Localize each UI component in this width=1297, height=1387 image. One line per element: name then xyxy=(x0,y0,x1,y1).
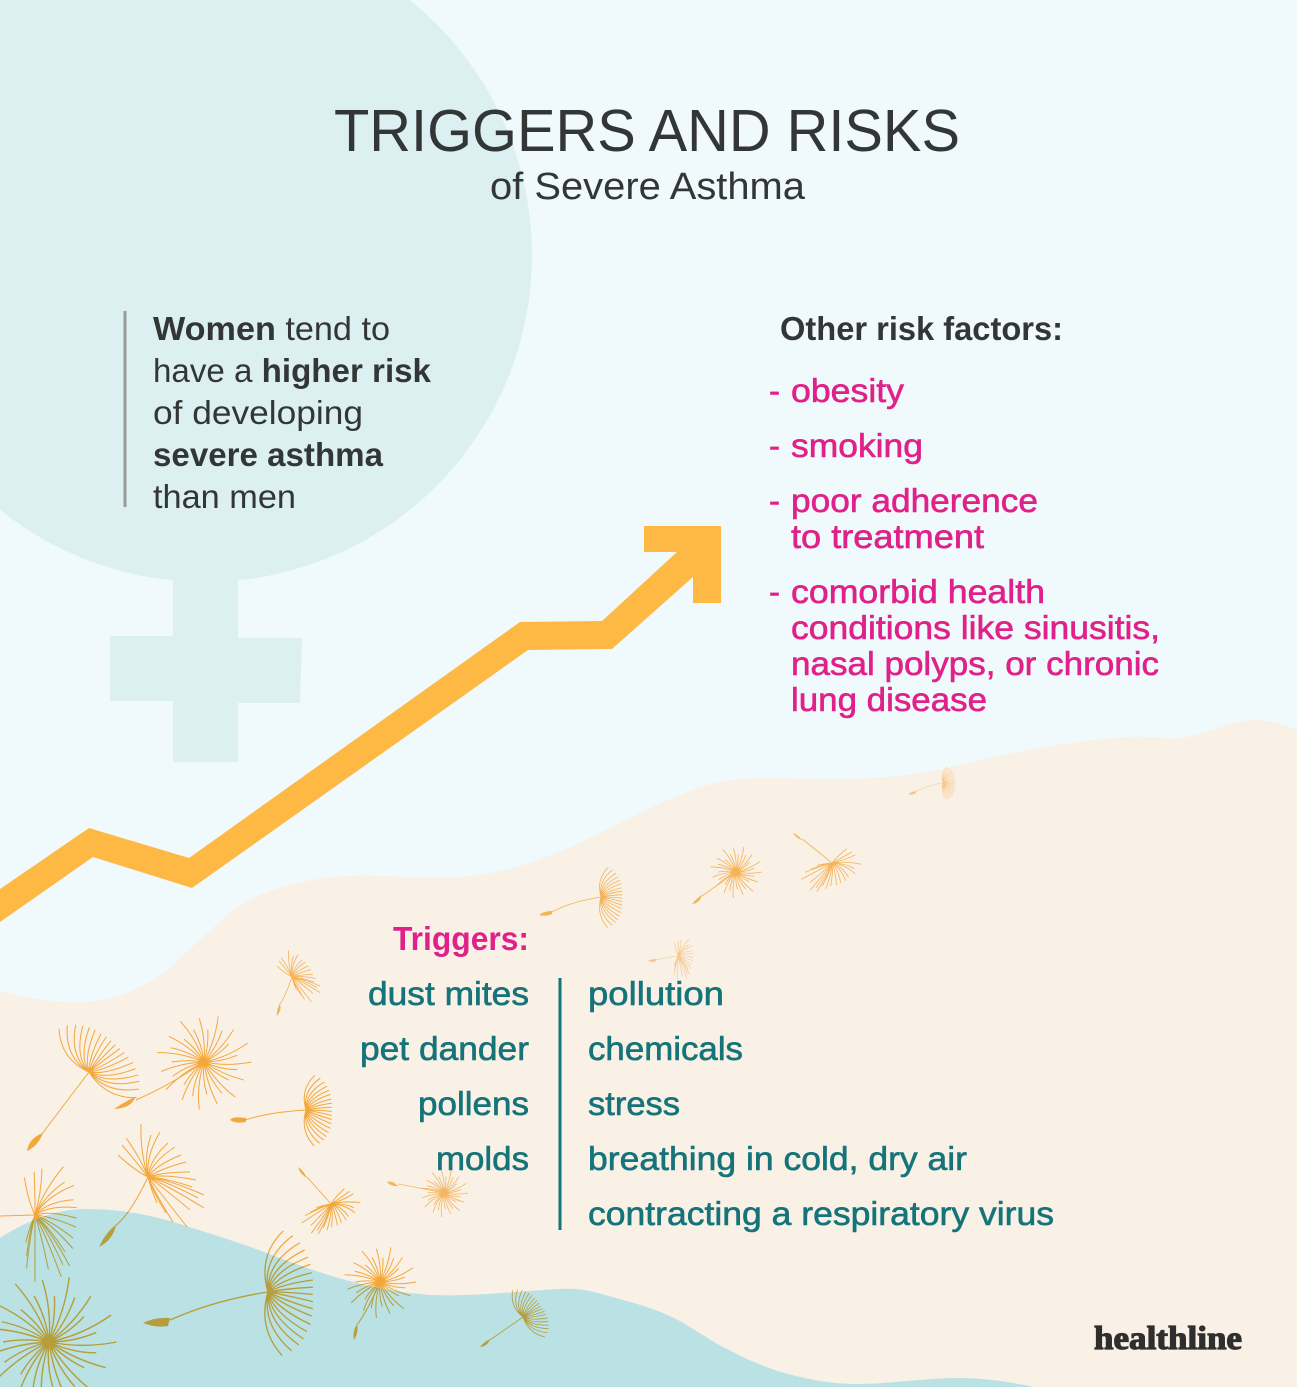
dandelion 17 xyxy=(648,933,707,984)
list: triggers right column: breathing in cold, dry air xyxy=(588,1140,967,1177)
heading: triggers: Triggers: xyxy=(393,920,529,957)
icon: female symbol xyxy=(0,0,532,762)
list: other risk factors xyxy=(769,372,1160,718)
dandelion 11 xyxy=(387,1170,468,1217)
dandelion 2 xyxy=(114,1016,252,1110)
title: of Severe Asthma xyxy=(490,166,806,208)
list: triggers right column: chemicals xyxy=(588,1030,743,1067)
rising arrow xyxy=(0,526,721,922)
list: triggers right column: stress xyxy=(588,1085,680,1122)
list: triggers left column: pollens xyxy=(418,1085,529,1122)
dandelion 5 xyxy=(0,1152,116,1293)
logo: healthline: healthline xyxy=(1094,1321,1242,1357)
beige wave xyxy=(0,720,1297,1387)
dandelion 13 xyxy=(539,867,622,928)
dandelion 8 xyxy=(345,1247,416,1340)
text block: women's risk: severe asthma xyxy=(153,436,384,473)
blue wave xyxy=(0,1209,1034,1387)
list: other risk factors: lung disease xyxy=(791,681,987,718)
text block: women's risk: than men xyxy=(153,478,296,515)
list: other risk factors: - xyxy=(769,427,780,464)
list: other risk factors: - xyxy=(769,372,780,409)
dandelion 14 xyxy=(692,847,762,904)
dandelion 9 xyxy=(480,1282,557,1347)
list: other risk factors: comorbid health xyxy=(791,573,1045,610)
dandelion 1 xyxy=(27,1010,154,1151)
dandelion 12 xyxy=(277,950,320,1016)
dandelion 15 xyxy=(793,833,864,898)
list: triggers right column: contracting a respiratory virus xyxy=(588,1195,1054,1232)
list: other risk factors: conditions like sinusitis, xyxy=(791,609,1160,646)
list: other risk factors: - xyxy=(769,573,780,610)
text block: women's risk: have a higher risk xyxy=(153,352,432,389)
title xyxy=(334,98,960,208)
dandelion 6 xyxy=(0,1277,116,1387)
list: other risk factors: poor adherence xyxy=(791,482,1038,519)
list: triggers right column xyxy=(588,975,1054,1232)
text block: women's risk xyxy=(153,310,432,515)
list: triggers left column: molds xyxy=(436,1140,529,1177)
dandelion 10 xyxy=(298,1167,361,1237)
list: other risk factors: - xyxy=(769,482,780,519)
text block: women's risk: of developing xyxy=(153,394,363,431)
vertical rule beside women's risk text xyxy=(124,311,126,507)
dandelion 7 xyxy=(143,1231,313,1356)
list: other risk factors: obesity xyxy=(791,372,905,409)
dandelion 3 xyxy=(230,1075,332,1146)
list: other risk factors: nasal polyps, or chronic xyxy=(791,645,1159,682)
list: triggers right column: pollution xyxy=(588,975,724,1012)
heading: other risk factors: Other risk factors: xyxy=(780,310,1063,347)
title: TRIGGERS AND RISKS xyxy=(334,98,960,164)
dandelion 16 xyxy=(908,767,955,800)
dandelion 4 xyxy=(99,1124,204,1247)
text block: women's risk: Women tend to xyxy=(153,310,390,347)
list: other risk factors: smoking xyxy=(791,427,923,464)
list: triggers left column: dust mites xyxy=(368,975,529,1012)
list: triggers left column xyxy=(360,975,529,1177)
list: other risk factors: to treatment xyxy=(791,518,984,555)
divider between trigger columns xyxy=(558,978,562,1230)
list: triggers left column: pet dander xyxy=(360,1030,529,1067)
